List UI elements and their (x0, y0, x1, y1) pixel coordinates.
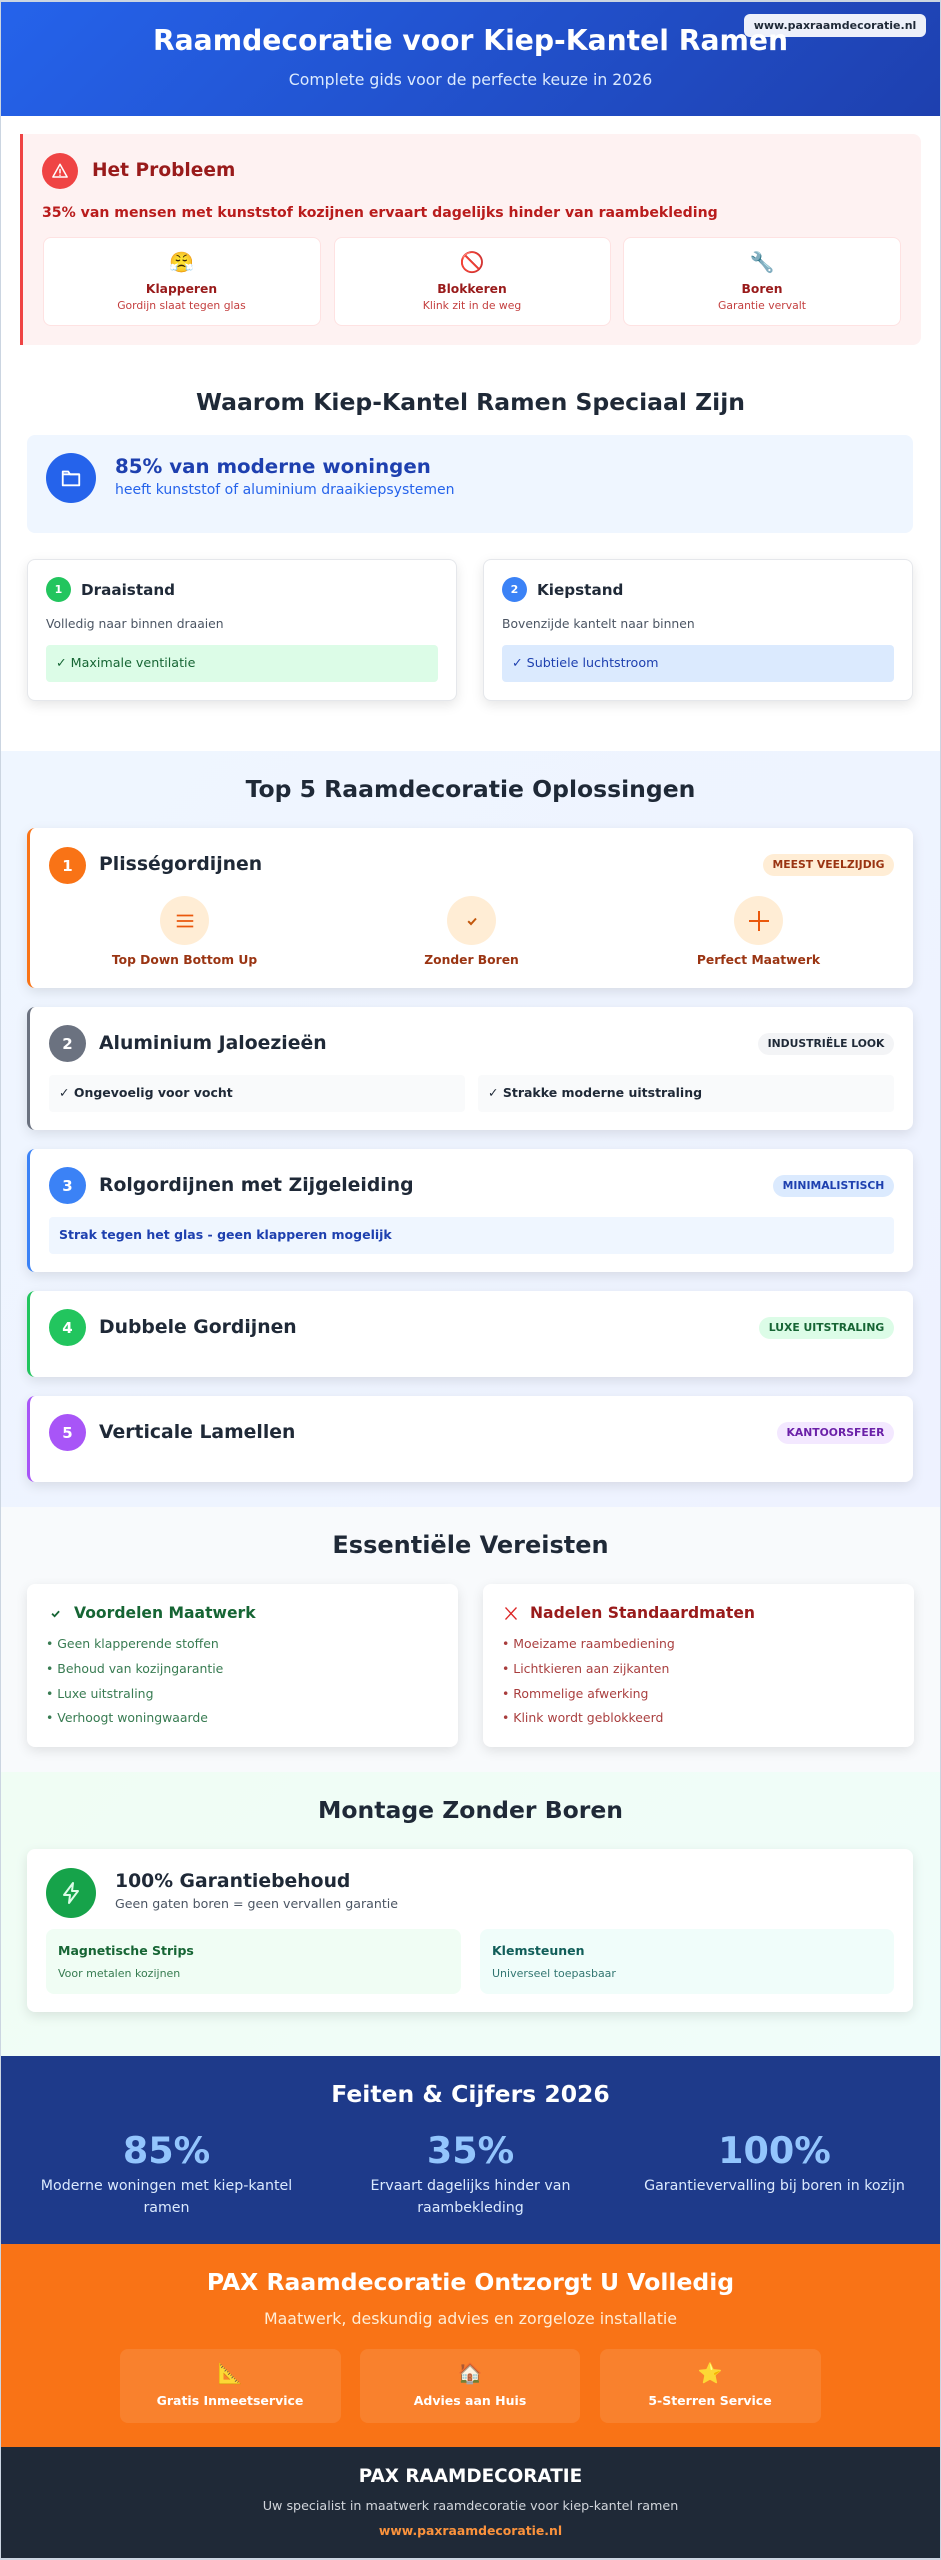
step number (502, 577, 527, 602)
section heading: Waarom Kiep-Kantel Ramen Speciaal Zijn (196, 388, 745, 416)
stat label: Garantievervalling bij boren in kozijn (644, 2178, 905, 2194)
card title: Draaistand (81, 581, 175, 599)
section: call to action (0, 2244, 941, 2447)
drawbacks list: • Klink wordt geblokkeerd (502, 1710, 663, 1725)
main title: Raamdecoratie voor Kiep-Kantel Ramen (153, 24, 788, 57)
step number: 1 (55, 583, 62, 596)
stat: 85 procent (41, 2129, 292, 2216)
stat number: 35% (427, 2129, 514, 2172)
card: klapperen (42, 237, 320, 326)
label: Perfect Maatwerk (697, 953, 820, 967)
number (49, 847, 86, 884)
icon: prohibited: 🚫 (460, 250, 484, 274)
label: Boren (742, 282, 782, 296)
badge: MEEST VEELZIJDIG (772, 858, 885, 871)
number (49, 1309, 86, 1346)
card: kiepstand (483, 559, 913, 701)
header banner (0, 0, 941, 116)
drawbacks list: • Rommelige afwerking (502, 1686, 648, 1701)
stat: 35 procent (371, 2129, 570, 2216)
drawbacks list: • Lichtkieren aan zijkanten (502, 1661, 669, 1676)
benefit text: ✓ Subtiele luchtstroom (512, 655, 658, 670)
footer brand: PAX RAAMDECORATIE (359, 2466, 582, 2487)
badge (773, 1175, 894, 1197)
cta text: Maatwerk, deskundig advies en zorgeloze installatie (264, 2309, 677, 2328)
name: Dubbele Gordijnen (99, 1317, 297, 1338)
name: Rolgordijnen met Zijgeleiding (99, 1175, 414, 1196)
badge: KANTOORSFEER (786, 1426, 884, 1439)
description: Garantie vervalt (718, 299, 806, 312)
option text: Voor metalen kozijnen (58, 1967, 180, 1980)
section heading: Montage Zonder Boren (318, 1796, 623, 1824)
service: advies aan huis (360, 2349, 580, 2423)
callout text: heeft kunststof of aluminium draaikiepsystemen (115, 482, 454, 498)
label: Gratis Inmeetservice (157, 2393, 303, 2408)
icon: star: ⭐ (698, 2361, 722, 2385)
solution 4: dubbele gordijnen (27, 1291, 913, 1377)
section: essentiele vereisten (0, 1507, 941, 1772)
stat label: Moderne woningen met kiep-kantel ramen (41, 2178, 292, 2216)
number (49, 1414, 86, 1451)
solution 5: verticale lamellen (27, 1396, 913, 1482)
number (49, 1167, 86, 1204)
number: 5 (62, 1424, 73, 1442)
section: montage zonder boren (0, 1772, 941, 2056)
name: Aluminium Jaloezieën (99, 1033, 327, 1054)
feature text: ✓ Ongevoelig voor vocht (59, 1085, 233, 1100)
badge (777, 1422, 894, 1444)
step number: 2 (511, 583, 518, 596)
benefit text: ✓ Maximale ventilatie (56, 655, 195, 670)
cta heading: PAX Raamdecoratie Ontzorgt U Volledig (207, 2268, 734, 2296)
panel: het probleem (20, 134, 921, 345)
option title: Magnetische Strips (58, 1943, 194, 1958)
benefits list: • Verhoogt woningwaarde (46, 1710, 208, 1725)
label: Advies aan Huis (414, 2393, 526, 2408)
label: Blokkeren (437, 282, 507, 296)
name: Plisségordijnen (99, 854, 262, 875)
label: Klapperen (146, 282, 217, 296)
section heading: Essentiële Vereisten (332, 1531, 609, 1559)
guarantee text: Geen gaten boren = geen vervallen garantie (115, 1896, 398, 1911)
feature: perfect maatwerk (697, 896, 820, 967)
feature: strak tegen glas (49, 1217, 894, 1254)
number (49, 1025, 86, 1062)
card: draaistand (27, 559, 457, 701)
benefit (46, 645, 438, 682)
card: voordelen maatwerk (27, 1584, 458, 1747)
icon: cross (505, 1607, 517, 1620)
label: Zonder Boren (424, 953, 519, 967)
badge: INDUSTRIËLE LOOK (768, 1037, 884, 1050)
feature: zonder boren (424, 896, 519, 967)
solution 3: rolgordijnen (27, 1149, 913, 1272)
benefit (502, 645, 894, 682)
badge: MINIMALISTISCH (783, 1179, 884, 1192)
website badge (744, 14, 926, 37)
card text: Bovenzijde kantelt naar binnen (502, 617, 695, 631)
option: klemsteunen (480, 1929, 894, 1994)
icon: check (52, 1610, 60, 1618)
label: Top Down Bottom Up (112, 953, 257, 967)
feature text: Strak tegen het glas - geen klapperen mogelijk (59, 1227, 392, 1242)
label: 5-Sterren Service (648, 2393, 772, 2408)
card: boren (623, 237, 901, 326)
icon: window (46, 453, 96, 503)
callout title: 85% van moderne woningen (115, 455, 431, 478)
drawbacks list (502, 1636, 675, 1725)
icon: check (447, 896, 496, 945)
website badge: www.paxraamdecoratie.nl (754, 19, 916, 32)
benefits list: • Luxe uitstraling (46, 1686, 153, 1701)
card: nadelen standaardmaten (483, 1584, 914, 1747)
feature: vocht (49, 1075, 465, 1112)
card: blokkeren (334, 237, 610, 326)
drawbacks list: • Moeizame raambediening (502, 1636, 675, 1651)
icon: warning triangle (42, 153, 78, 189)
footer tagline: Uw specialist in maatwerk raamdecoratie voor kiep-kantel ramen (263, 2498, 678, 2513)
icon: wrench: 🔧 (750, 250, 774, 274)
feature text: ✓ Strakke moderne uitstraling (488, 1085, 702, 1100)
card text: Volledig naar binnen draaien (46, 617, 224, 631)
option text: Universeel toepasbaar (492, 1967, 616, 1980)
stat number: 85% (123, 2129, 210, 2172)
option: magnetische strips (46, 1929, 461, 1994)
icon: lightning (46, 1868, 96, 1918)
footer link: www.paxraamdecoratie.nl (379, 2523, 562, 2538)
guarantee title: 100% Garantiebehoud (115, 1871, 350, 1892)
service: 5 sterren (600, 2349, 820, 2423)
card: garantiebehoud (27, 1849, 913, 2012)
option title: Klemsteunen (492, 1943, 585, 1958)
benefits list (46, 1636, 223, 1725)
badge (758, 1033, 894, 1055)
badge (759, 1317, 894, 1339)
number: 1 (62, 856, 73, 874)
number: 3 (62, 1176, 73, 1194)
card title: Nadelen Standaardmaten (530, 1604, 755, 1622)
badge (763, 854, 894, 876)
problem heading: Het Probleem (92, 160, 235, 181)
card title: Voordelen Maatwerk (74, 1604, 256, 1622)
service: inmeetservice (120, 2349, 340, 2423)
stat label: Ervaart dagelijks hinder van raambekleding (371, 2178, 570, 2216)
problem statement: 35% van mensen met kunststof kozijnen ervaart dagelijks hinder van raambekleding (42, 205, 718, 221)
number: 2 (62, 1034, 73, 1052)
solution 1: plissegordijnen (27, 828, 913, 988)
footer (0, 2447, 941, 2558)
icon: plus (734, 896, 783, 945)
icon: house: 🏠 (458, 2361, 482, 2385)
section: feiten en cijfers (0, 2056, 941, 2244)
stat: 100 procent (644, 2129, 905, 2194)
section: waarom speciaal (24, 388, 916, 708)
stat number: 100% (718, 2129, 831, 2172)
number: 4 (62, 1318, 73, 1336)
badge: LUXE UITSTRALING (769, 1321, 884, 1334)
subtitle: Complete gids voor de perfecte keuze in 2026 (289, 70, 652, 89)
benefits list: • Behoud van kozijngarantie (46, 1661, 223, 1676)
icon: ruler: 📐 (218, 2361, 242, 2385)
benefits list: • Geen klapperende stoffen (46, 1636, 219, 1651)
description: Gordijn slaat tegen glas (117, 299, 246, 312)
solution 2: aluminium jaloezieen (27, 1007, 913, 1130)
icon: lines (160, 896, 209, 945)
section heading: Feiten & Cijfers 2026 (331, 2080, 610, 2108)
section heading: Top 5 Raamdecoratie Oplossingen (246, 775, 695, 803)
callout: 85 procent (27, 435, 913, 533)
feature: top down bottom up (112, 896, 257, 967)
step number (46, 577, 71, 602)
card title: Kiepstand (537, 581, 623, 599)
icon: angry face: 😤 (169, 250, 194, 274)
section: top 5 oplossingen (0, 751, 941, 1507)
description: Klink zit in de weg (423, 299, 521, 312)
name: Verticale Lamellen (99, 1422, 295, 1443)
feature: uitstraling (478, 1075, 894, 1112)
